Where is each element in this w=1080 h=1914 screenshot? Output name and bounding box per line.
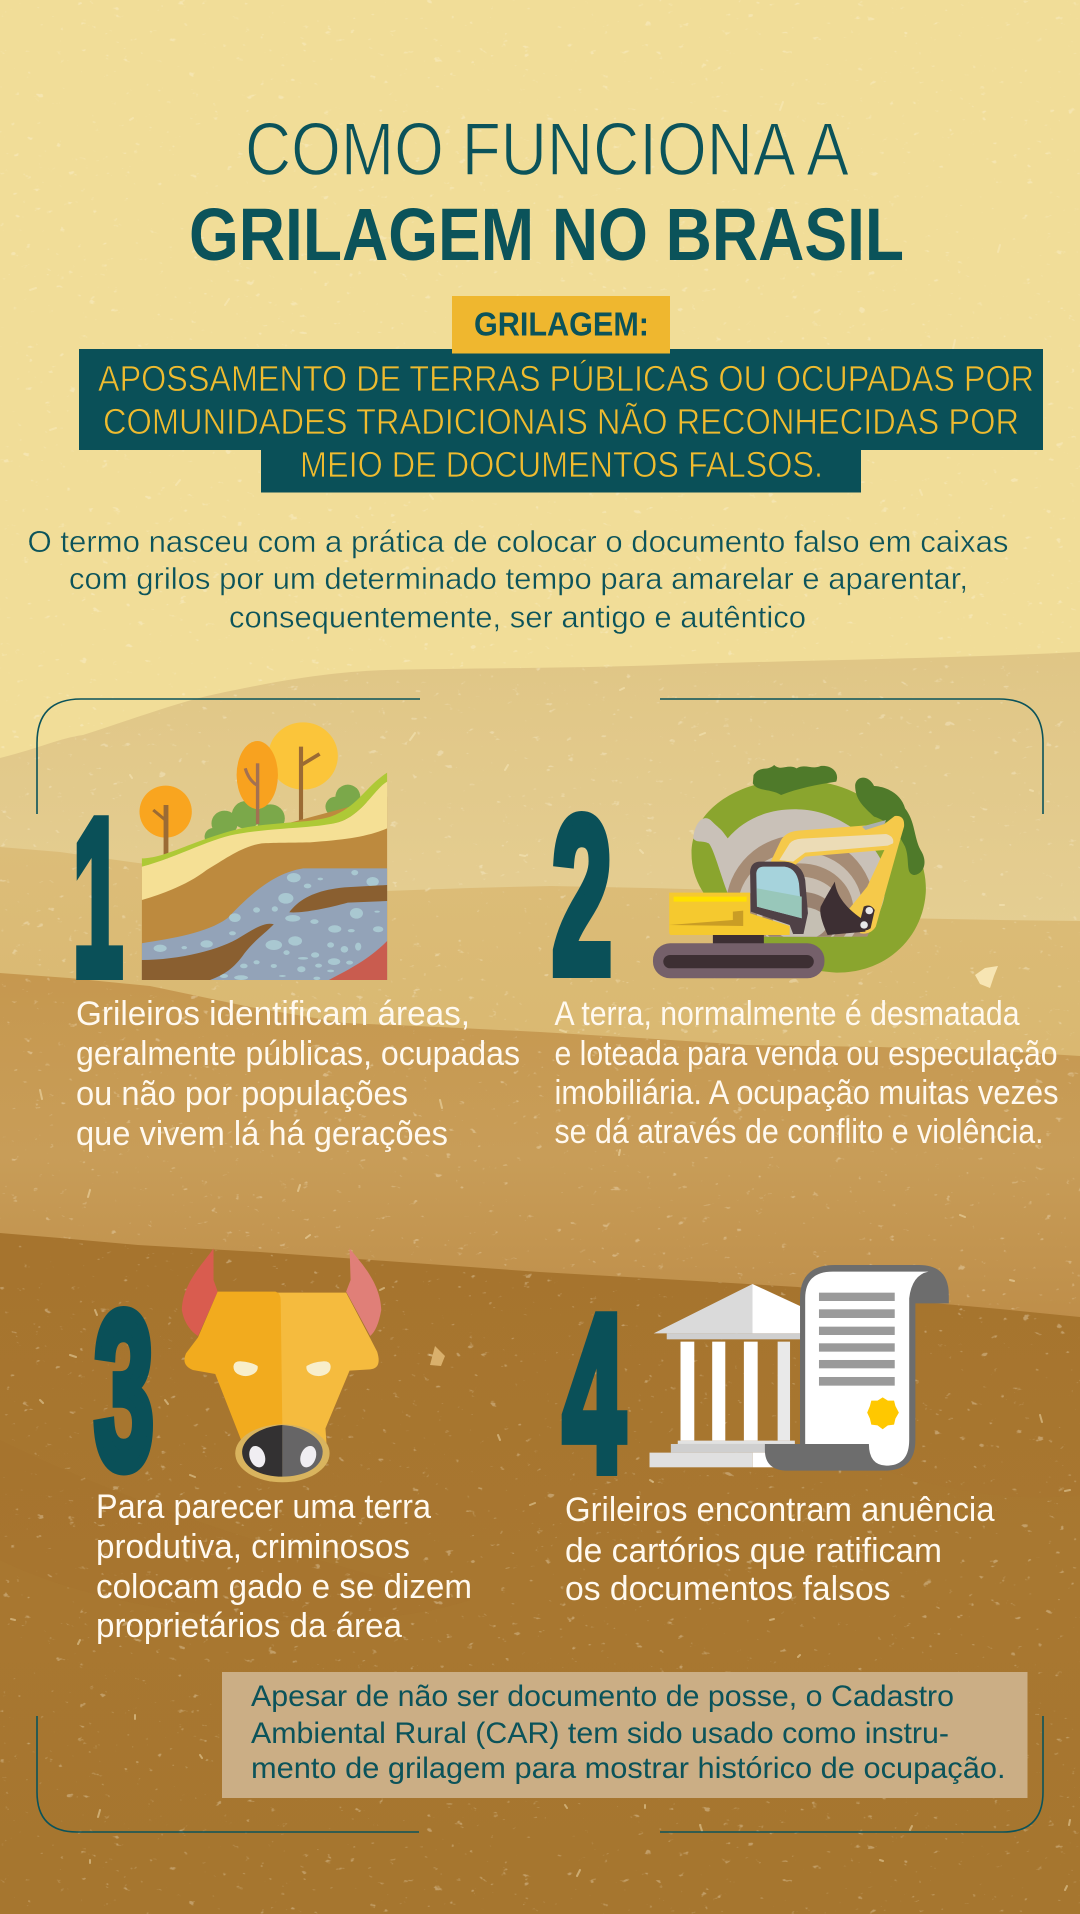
eyes bbox=[233, 1361, 331, 1376]
icon: soil layers with trees bbox=[139, 722, 387, 980]
callout: CAR note bbox=[222, 1672, 1028, 1798]
step 3 text: produtiva, criminosos bbox=[96, 1528, 410, 1566]
bushes bbox=[205, 785, 360, 845]
cab bbox=[750, 862, 808, 934]
icon: excavator in cleared land bbox=[653, 765, 926, 978]
title: GRILAGEM NO BRASIL bbox=[189, 193, 904, 276]
step 2 text bbox=[554, 995, 1058, 1151]
step 2 text: A terra, normalmente é desmatada bbox=[554, 995, 1020, 1033]
track bbox=[653, 943, 824, 978]
intro text: O termo nasceu com a prática de colocar o documento falso em caixas bbox=[28, 524, 1008, 559]
joints bbox=[859, 906, 875, 930]
deed paper bbox=[805, 1272, 928, 1466]
bright flake bbox=[975, 966, 998, 988]
title: COMO FUNCIONA A bbox=[245, 107, 849, 191]
dark soil lower bbox=[142, 924, 274, 980]
tree orange tall bbox=[237, 741, 278, 824]
definition text bbox=[98, 358, 1034, 485]
callout: CAR note: mento de grilagem para mostrar histórico de ocupação. bbox=[251, 1752, 1006, 1785]
flake on dark soil bbox=[430, 1346, 445, 1366]
nose left bbox=[242, 1425, 282, 1477]
step 4 text: de cartórios que ratificam bbox=[565, 1532, 942, 1570]
definition text: MEIO DE DOCUMENTOS FALSOS. bbox=[300, 444, 823, 485]
intro text bbox=[28, 524, 1008, 634]
step 1 text: que vivem lá há gerações bbox=[76, 1115, 448, 1153]
frame: bottom right bracket bbox=[660, 1716, 1043, 1832]
base bbox=[650, 1444, 774, 1467]
grass bbox=[142, 773, 387, 867]
frame: top left bracket bbox=[37, 699, 420, 814]
seal bbox=[867, 1397, 899, 1429]
soil brown bbox=[142, 797, 387, 980]
nostrils bbox=[247, 1444, 319, 1469]
callout: CAR note: Apesar de não ser documento de posse, o Cadastro bbox=[251, 1680, 954, 1713]
icon: bull head bbox=[182, 1248, 381, 1482]
green cleared land bbox=[692, 780, 926, 973]
text: 3 bbox=[94, 1267, 154, 1515]
pebbles bbox=[154, 870, 383, 980]
excavator arm bbox=[771, 816, 904, 934]
intro text: com grilos por um determinado tempo para amarelar e aparentar, bbox=[69, 561, 968, 596]
head left bbox=[184, 1292, 282, 1440]
step 1 text: geralmente públicas, ocupadas bbox=[76, 1035, 520, 1073]
callout: CAR note: Ambiental Rural (CAR) tem sido usado como instru- bbox=[251, 1717, 949, 1750]
right horn bbox=[346, 1248, 381, 1336]
definition panel bbox=[79, 296, 1043, 492]
left horn bbox=[182, 1248, 218, 1336]
stream bbox=[142, 868, 387, 980]
tree yellow bbox=[268, 722, 338, 822]
step 3 text: colocam gado e se dizem bbox=[96, 1568, 472, 1606]
deed lines bbox=[819, 1293, 895, 1386]
track base bbox=[713, 933, 764, 945]
muzzle ring bbox=[235, 1424, 330, 1482]
dark soil upper bbox=[289, 885, 387, 912]
foliage top bbox=[753, 765, 837, 795]
tree orange small bbox=[139, 786, 192, 858]
yellow tag bbox=[452, 296, 670, 354]
step 4 text: os documentos falsos bbox=[565, 1570, 890, 1608]
head right bbox=[276, 1293, 379, 1453]
intro text: consequentemente, ser antigo e autêntico bbox=[229, 600, 806, 634]
text: 2 bbox=[552, 772, 612, 1020]
title bbox=[189, 107, 904, 276]
foliage right bbox=[855, 778, 925, 875]
mine pit rings bbox=[693, 809, 884, 937]
step 3 text: Para parecer uma terra bbox=[96, 1488, 431, 1526]
soil cream bbox=[142, 782, 387, 900]
red rock bbox=[329, 941, 387, 980]
step 4 text bbox=[565, 1491, 995, 1608]
text: 1 bbox=[73, 774, 123, 1022]
deed scroll backing bbox=[765, 1265, 949, 1471]
nose right bbox=[282, 1425, 323, 1477]
step 4 number: 4 bbox=[563, 1270, 625, 1518]
step 3 text: proprietários da área bbox=[96, 1607, 402, 1645]
beam bbox=[667, 1333, 804, 1339]
pediment bbox=[654, 1284, 809, 1333]
bucket bbox=[820, 882, 865, 935]
step 1 text bbox=[76, 995, 520, 1153]
frame: bottom left bracket bbox=[37, 1716, 419, 1832]
teal definition box bbox=[79, 349, 1043, 492]
icon: notary building and deed bbox=[650, 1265, 949, 1471]
step 3 text bbox=[96, 1488, 472, 1645]
step 1 text: Grileiros identificam áreas, bbox=[76, 995, 470, 1033]
frame: top right bracket bbox=[660, 699, 1043, 814]
columns bbox=[678, 1342, 795, 1444]
step 1 text: ou não por populações bbox=[76, 1075, 408, 1113]
step 4 text: Grileiros encontram anuência bbox=[565, 1491, 995, 1529]
yellow tag: GRILAGEM: bbox=[474, 306, 649, 342]
body bbox=[669, 893, 790, 935]
